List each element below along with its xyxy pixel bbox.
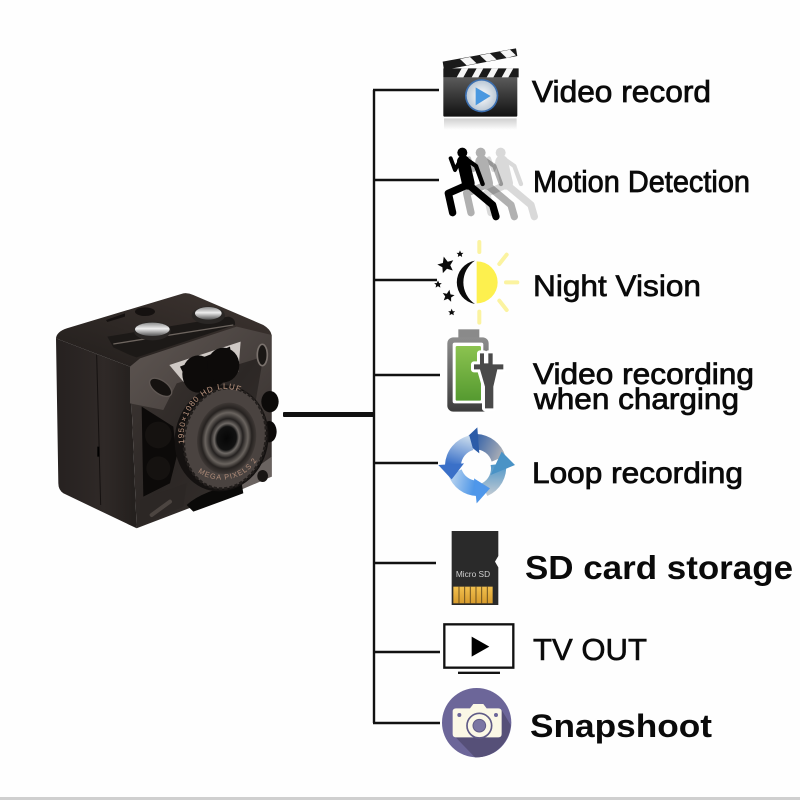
label: TV OUT: TV OUT (533, 632, 647, 667)
bottom edge band (0, 797, 800, 800)
label: Video recording when charging: when charging (533, 383, 739, 416)
contacts (453, 587, 493, 603)
icon: clapperboard (443, 48, 519, 130)
icon: running figures (448, 148, 534, 217)
lens (190, 397, 263, 480)
label: Video record: Video record (532, 74, 711, 109)
IR LEDs bottom (187, 483, 243, 512)
lens ring lettering: 1950×1080 HD LLUF (178, 383, 242, 444)
IR LED window left (142, 407, 177, 497)
label: Video recording when charging (533, 358, 754, 416)
icon: camera badge (442, 688, 511, 757)
IR LEDs right (261, 391, 279, 412)
light runner (487, 148, 534, 217)
lens ring (165, 376, 278, 500)
metal buttons (134, 322, 171, 340)
icon: micro SD card (452, 531, 498, 605)
camera body left face (56, 338, 137, 528)
camera body top face (56, 293, 272, 367)
IR LED window top (169, 342, 241, 390)
arrow right (482, 463, 506, 496)
black runner (448, 148, 496, 217)
connector tree (373, 90, 440, 723)
icon: battery charging (447, 329, 503, 412)
label: Snapshoot: Snapshoot (530, 708, 712, 744)
arrow bottom (448, 469, 477, 496)
label: Video recording when charging: Video recording (533, 358, 754, 391)
label: Night Vision: Night Vision (533, 270, 701, 303)
camera body front face (130, 335, 272, 528)
connector from camera (283, 412, 374, 417)
label: Loop recording: Loop recording (532, 457, 743, 490)
product photo: mini camera (56, 293, 279, 528)
icon: TV play (444, 624, 513, 674)
label: SD card storage: SD card storage (525, 549, 793, 586)
arrow top (475, 434, 505, 462)
icon: night and day (434, 242, 517, 323)
icon: loop arrows (438, 427, 515, 503)
button plate (107, 317, 235, 357)
label: Motion Detection: Motion Detection (533, 164, 750, 199)
arrow left (445, 436, 473, 465)
product photo: mini camera: MEGA PIXELS 2 (198, 458, 256, 480)
mid runner (467, 148, 514, 217)
card label: Micro SD (456, 569, 490, 579)
